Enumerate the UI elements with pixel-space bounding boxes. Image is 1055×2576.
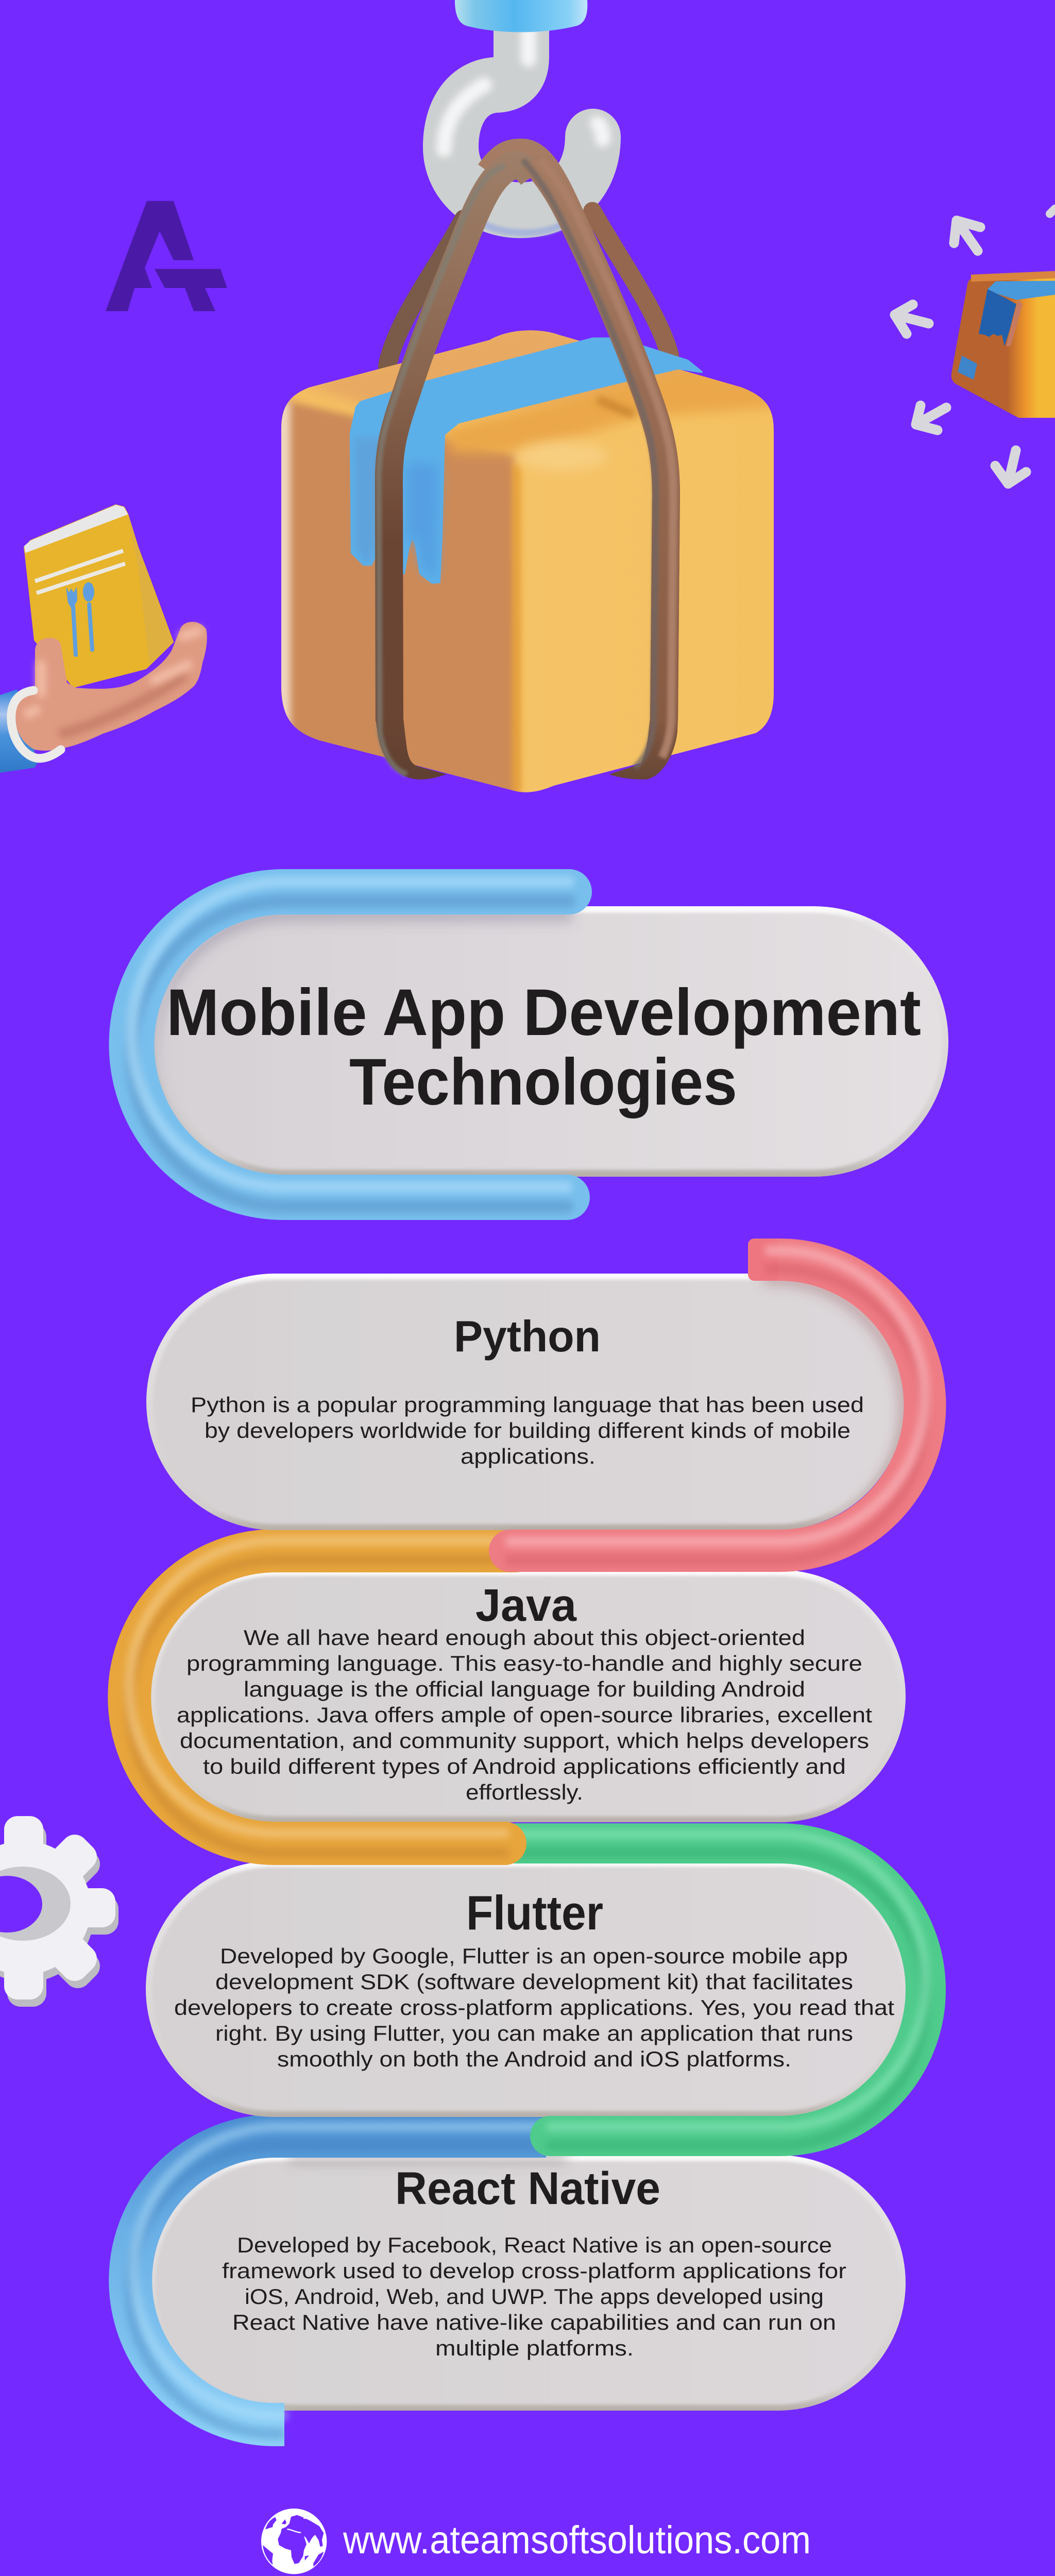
React Native heading: React Native	[395, 2162, 660, 2214]
Java body text: programming language. This easy-to-handle and highly secure	[186, 1651, 862, 1675]
React Native body text	[222, 2233, 846, 2360]
Java body text: We all have heard enough about this object-oriented	[244, 1625, 805, 1650]
panel: Flutter	[146, 1834, 926, 2145]
Flutter body text: Developed by Google, Flutter is an open-source mobile app	[220, 1944, 848, 1968]
icon: gear	[0, 1816, 118, 2007]
Flutter body text: smoothly on both the Android and iOS platforms.	[277, 2047, 791, 2071]
Java body text: applications. Java offers ample of open-source libraries, excellent	[177, 1703, 872, 1727]
rope foot right	[609, 719, 678, 779]
Python body text: applications.	[461, 1444, 595, 1468]
Python body text	[191, 1393, 864, 1468]
icon: blue tape on parcel	[351, 338, 702, 583]
React Native body text: iOS, Android, Web, and UWP. The apps developed using	[245, 2284, 824, 2309]
Java body text: documentation, and community support, which helps developers	[180, 1728, 869, 1753]
icon: front rope straps	[376, 152, 678, 779]
orange tube around Java	[129, 1540, 515, 1853]
Java body text	[177, 1625, 872, 1804]
panel: title pill	[132, 882, 948, 1207]
panel: Python	[146, 1239, 925, 1560]
React Native body text: multiple platforms.	[435, 2336, 634, 2360]
Python body text: Python is a popular programming language that has been used	[191, 1393, 864, 1417]
arrow up-left	[954, 221, 980, 251]
Java body text: to build different types of Android applications efficiently and	[203, 1754, 846, 1778]
icon: cardboard parcel	[268, 319, 783, 804]
Flutter body text: right. By using Flutter, you can make an application that runs	[215, 2021, 853, 2045]
title text: Mobile App Development	[166, 976, 921, 1049]
package	[25, 505, 173, 687]
icon: crane hook and block	[444, 0, 603, 233]
panel: React Native	[130, 2127, 906, 2434]
arrow cut off	[1050, 209, 1055, 214]
Flutter body text: development SDK (software development kit) that facilitates	[215, 1970, 853, 1994]
icon: company logo	[106, 201, 227, 311]
React Native body text: React Native have native-like capabilities and can run on	[232, 2310, 836, 2334]
Flutter heading: Flutter	[466, 1886, 603, 1940]
Flutter body text	[174, 1944, 894, 2071]
title text	[166, 976, 921, 1119]
shirt cuff	[11, 690, 61, 758]
Python body text: by developers worldwide for building different kinds of mobile	[205, 1418, 850, 1443]
arrow down	[995, 450, 1026, 484]
red tube around Python	[510, 1239, 925, 1560]
icon: hand holding food package	[0, 505, 207, 773]
title text: Technologies	[349, 1045, 737, 1119]
React Native body text: Developed by Facebook, React Native is an open-source	[237, 2233, 832, 2257]
green tube around Flutter	[515, 1834, 926, 2145]
Java body text: language is the official language for building Android	[244, 1677, 805, 1701]
icon: small parcel with arrows	[895, 209, 1055, 484]
panel: Java	[129, 1540, 906, 1853]
Python heading: Python	[454, 1312, 601, 1361]
hand	[15, 622, 207, 751]
Flutter body text: developers to create cross-platform applications. Yes, you read that	[174, 1995, 894, 2020]
Java heading: Java	[475, 1579, 577, 1631]
arrow down-left	[916, 405, 946, 430]
icon: globe	[261, 2509, 327, 2574]
Java body text: effortlessly.	[466, 1780, 583, 1804]
arrow left	[895, 304, 929, 334]
website address: www.ateamsoftsolutions.com	[343, 2518, 811, 2562]
blue tube around React Native	[130, 2127, 549, 2434]
React Native body text: framework used to develop cross-platform applications for	[222, 2259, 846, 2283]
rope foot left	[376, 719, 447, 779]
icon: back rope straps	[387, 211, 670, 366]
blue tube around title	[132, 882, 569, 1207]
